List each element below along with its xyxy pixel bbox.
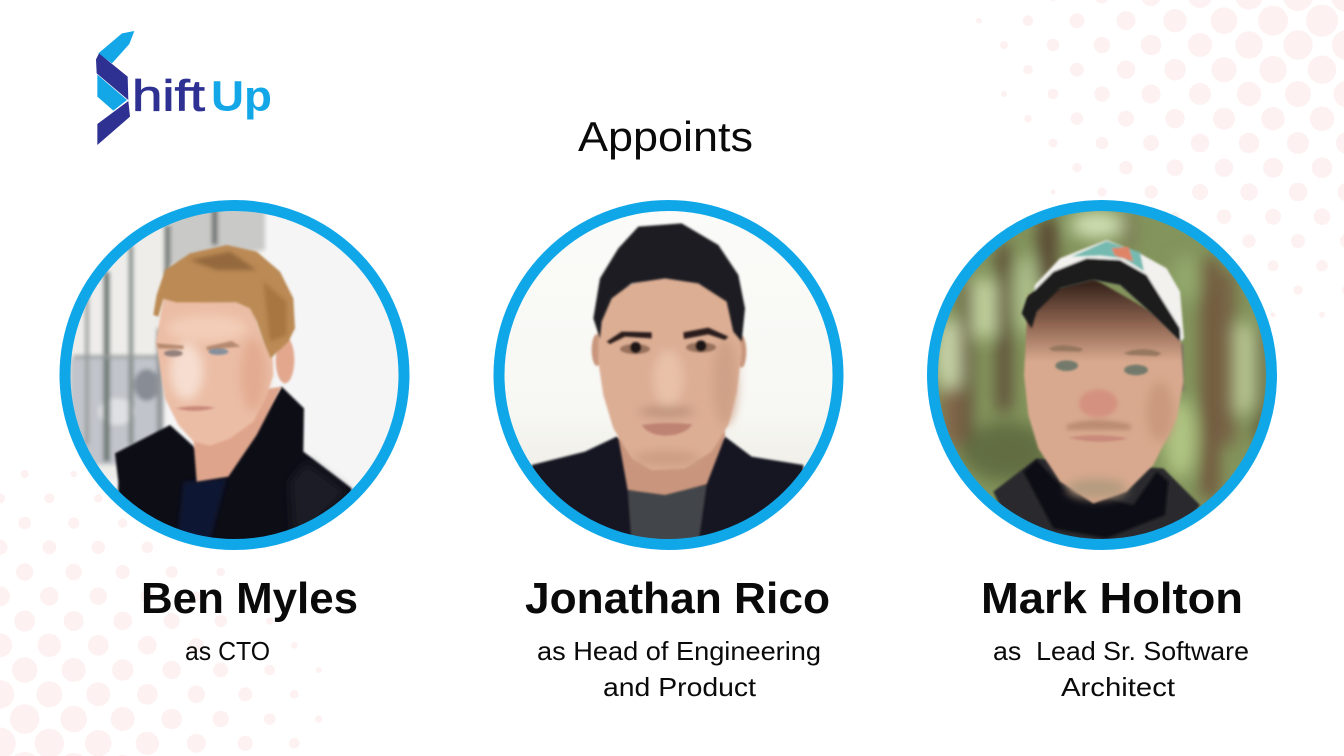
ring <box>932 206 1272 544</box>
ring <box>65 206 404 544</box>
jacket <box>114 386 353 539</box>
hair <box>153 245 295 358</box>
lips <box>1068 435 1128 442</box>
logo icon: S ribbon <box>96 31 134 145</box>
hair at sides <box>1024 332 1035 382</box>
hoodie <box>993 458 1200 548</box>
lips <box>176 406 215 411</box>
neck <box>193 387 282 482</box>
face shading <box>633 338 737 466</box>
name: Jonathan Rico: Jonathan Rico <box>525 574 830 623</box>
role: as CTO: as CTO <box>185 636 270 666</box>
brows <box>607 332 652 344</box>
hair <box>593 223 745 342</box>
portrait: Mark Holton <box>930 205 1277 552</box>
eyes <box>1055 360 1078 371</box>
brows <box>1048 345 1083 352</box>
brows <box>157 343 183 349</box>
halftone dots: bottom left <box>0 470 322 756</box>
halftone dots: top right <box>976 0 1344 318</box>
role: Lead Sr. Software Architect <box>993 636 1249 702</box>
logo text: Up: Up <box>211 73 272 121</box>
face shading <box>1067 382 1173 498</box>
role: Head of Engineering and Product: and Product <box>603 672 757 702</box>
role: Head of Engineering and Product: as Head of Engineering <box>537 636 821 666</box>
lips <box>642 423 692 436</box>
face <box>156 298 273 446</box>
title: Appoints <box>578 113 753 160</box>
name: Ben Myles: Ben Myles <box>141 574 358 623</box>
ears <box>592 334 602 366</box>
shirt <box>628 485 707 545</box>
face shading <box>167 315 267 412</box>
role: Lead Sr. Software Architect: as Lead Sr. Software <box>993 636 1249 666</box>
cap brim <box>1022 258 1181 342</box>
jacket <box>531 435 805 536</box>
portrait: Ben Myles <box>63 205 410 562</box>
neck <box>617 428 725 495</box>
role: Head of Engineering and Product <box>537 636 821 702</box>
face <box>1024 278 1183 503</box>
ring <box>499 206 838 544</box>
logo: ShiftUp <box>96 31 272 145</box>
role: Lead Sr. Software Architect: Architect <box>1061 672 1176 702</box>
logo text: hift: hift <box>132 72 205 121</box>
cap crown <box>1033 240 1184 342</box>
name: Mark Holton: Mark Holton <box>981 574 1243 623</box>
portrait: Jonathan Rico <box>498 205 845 562</box>
eyes <box>164 350 183 357</box>
eyes <box>620 344 650 354</box>
face <box>598 272 742 470</box>
